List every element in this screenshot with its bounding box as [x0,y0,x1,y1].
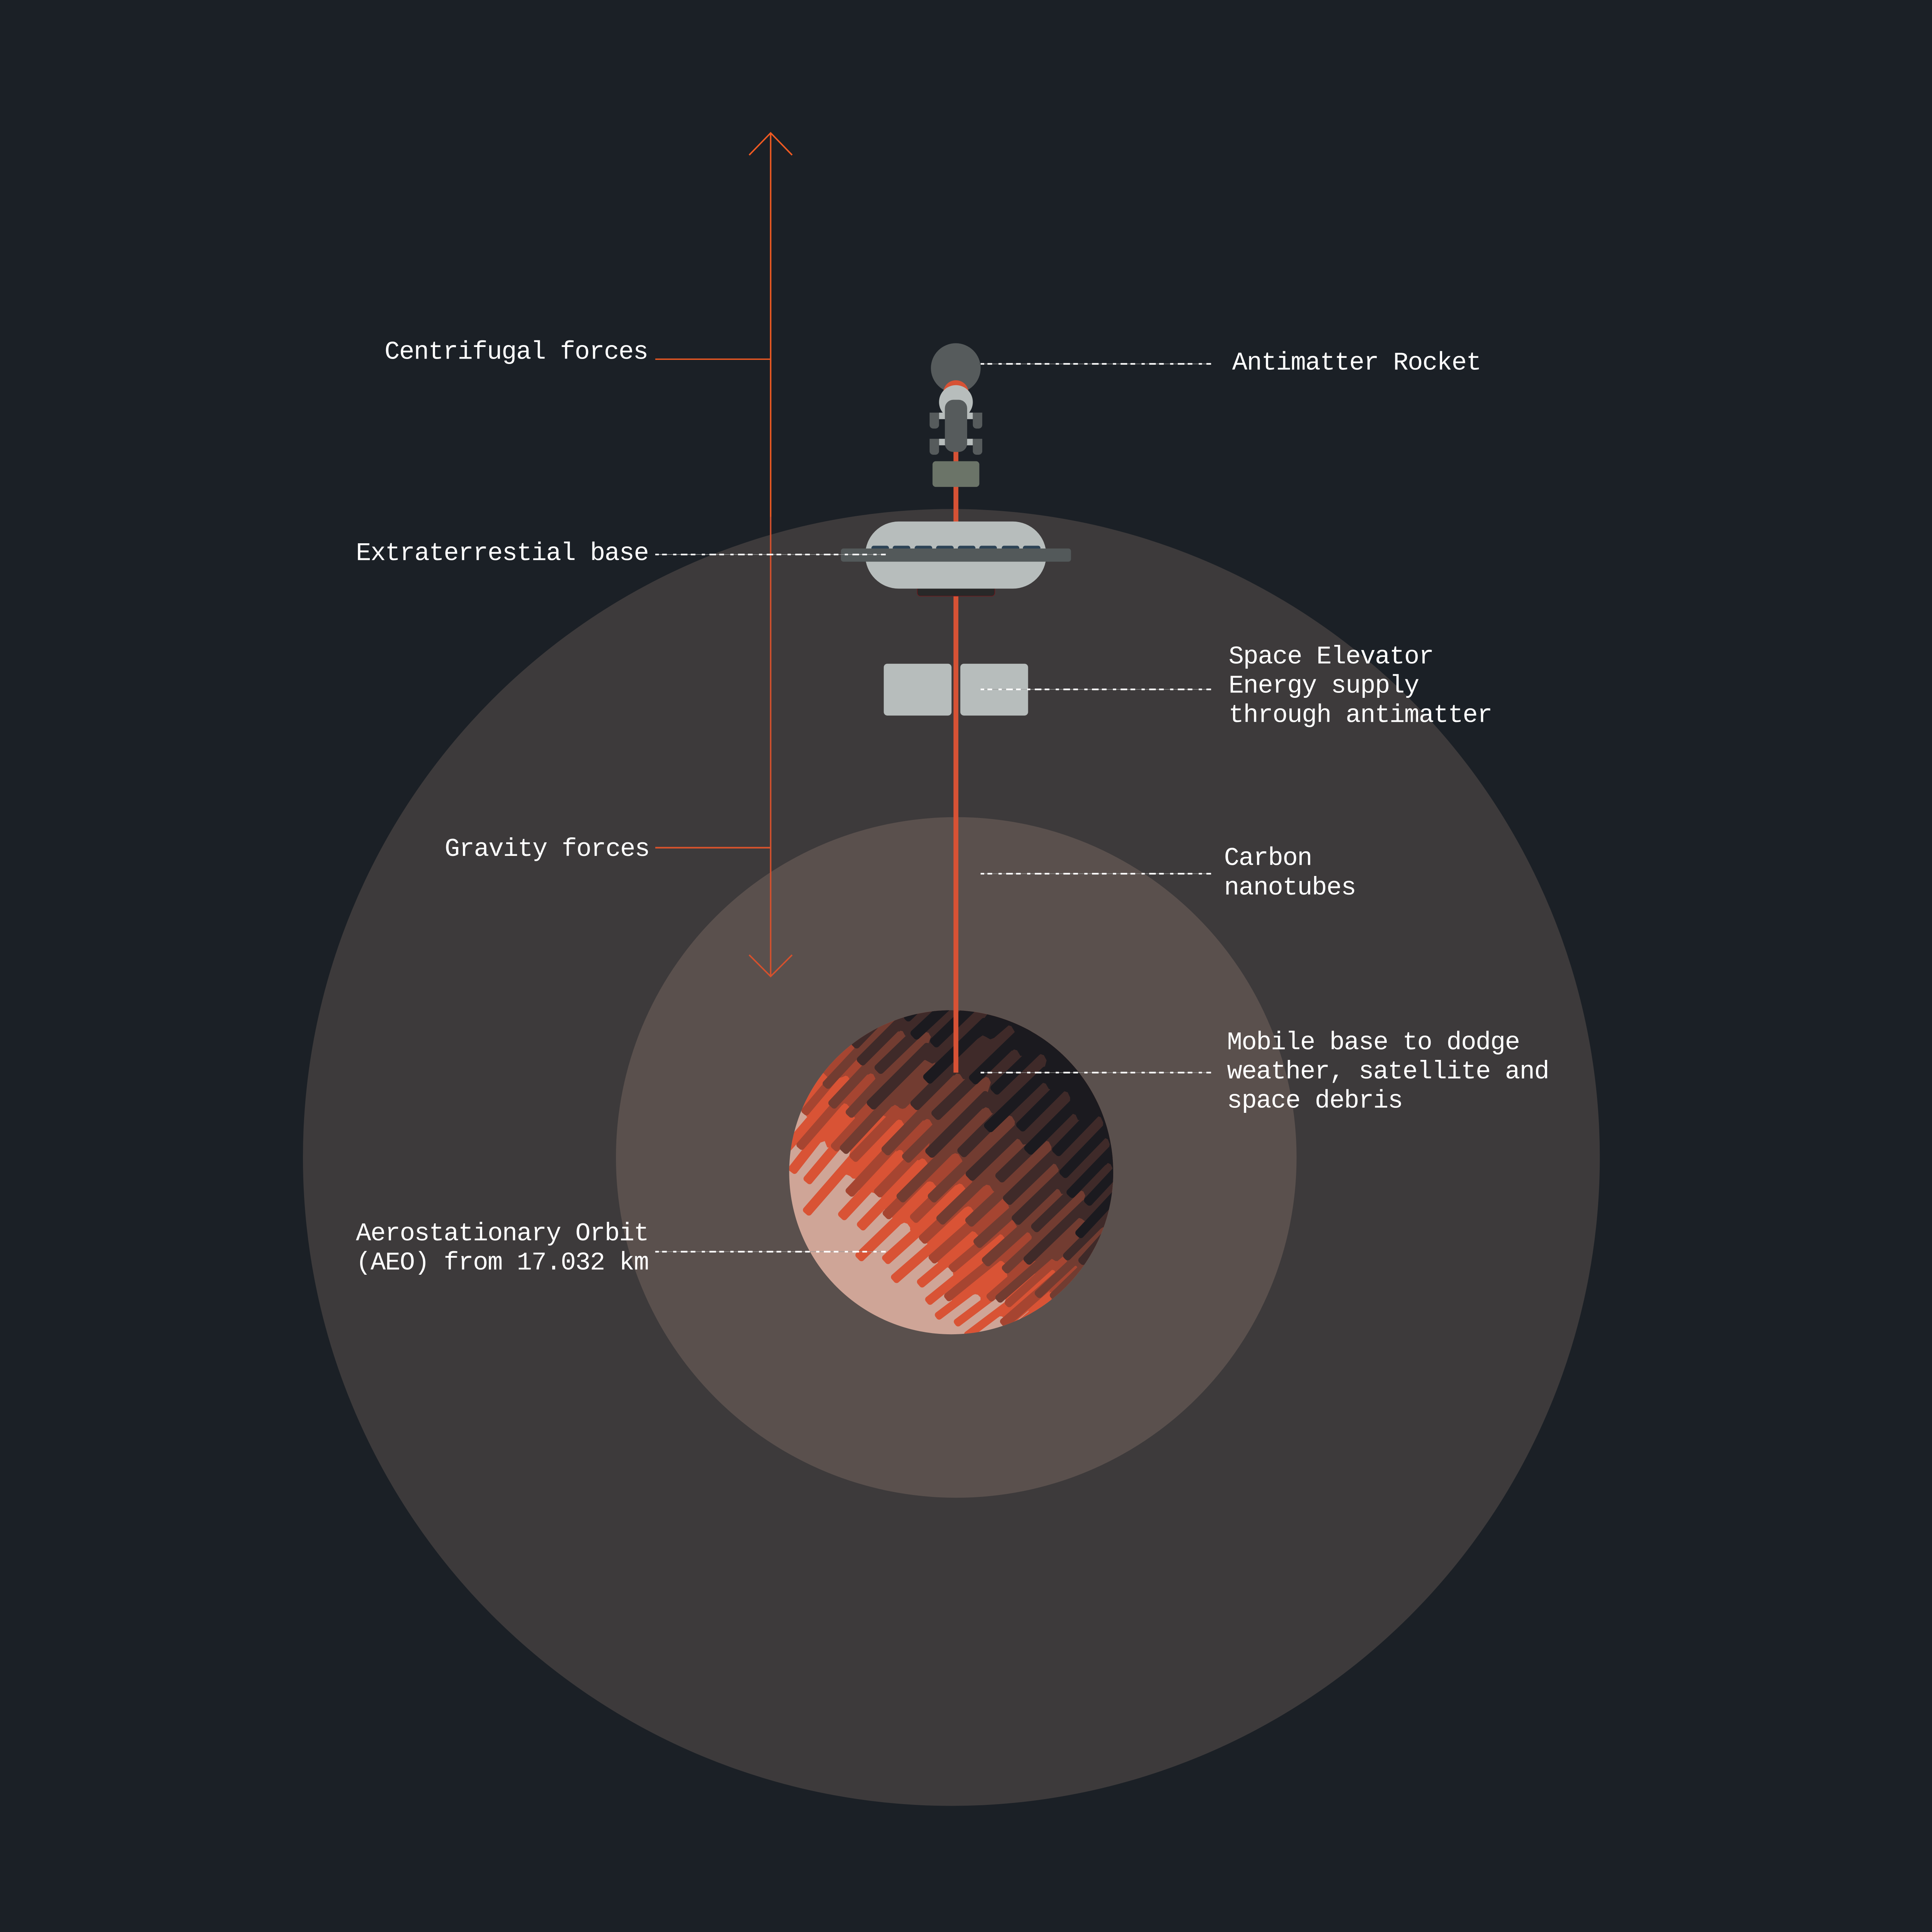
base strip [841,548,1071,562]
label: Space Elevator energy supply: Space Elevator [1229,642,1434,671]
label: Mobile base [1227,1028,1549,1116]
label: Aerostationary Orbit [356,1219,648,1277]
base windows [871,546,1041,552]
inner atmosphere circle [616,817,1296,1498]
planet layer: brown stripes [821,997,1144,1304]
rocket orange ring [943,380,969,406]
space elevator cable: carbon nanotubes [954,449,958,1073]
planet layer: light sliver [1017,1311,1029,1320]
label: Space Elevator energy supply: Energy supply [1229,672,1419,701]
leader: extraterrestrial base [655,554,886,555]
planet layer: red-brown stripes [795,997,1144,1329]
rocket body [945,400,967,452]
label: Space Elevator energy supply [1229,642,1492,730]
leader: aerostationary orbit [655,1251,886,1252]
rocket top sphere [931,343,981,393]
icon: energy panels [884,664,1028,716]
label: Extraterrestial base: Extraterrestial base [356,539,648,568]
planet layer: dark brown stripes [850,981,1144,1266]
rocket side pods [930,413,982,455]
rocket light collar [939,385,973,419]
icon: extraterrestrial base [841,522,1071,596]
label: Aerostationary Orbit: Aerostationary Orbit [356,1219,648,1248]
planet layer: orange stripes [789,1010,1113,1334]
label: Centrifugal forces: Centrifugal forces [384,338,648,367]
label: Aerostationary Orbit: (AEO) from 17.032 km [356,1248,648,1277]
base capsule [865,522,1046,588]
label: Carbon nanotubes: nanotubes [1224,873,1356,902]
base under tray [917,587,995,596]
planet layer: near-black stripes [903,957,1149,1240]
outer orbit circle [303,509,1600,1806]
label: Antimatter Rocket: Antimatter Rocket [1232,348,1481,377]
label: Mobile base: weather, satellite and [1227,1057,1549,1086]
label: Mobile base: space debris [1227,1087,1403,1116]
leader: centrifugal forces [655,359,770,360]
planet Mars with diagonal stripes [789,1010,1114,1335]
arrow: forces double-headed vertical arrow [749,133,792,976]
leader: mobile base [981,1072,1211,1073]
label: Mobile base: Mobile base to dodge [1227,1028,1520,1057]
label: Space Elevator energy supply: through antimatter [1229,701,1492,730]
label: Carbon nanotubes [1224,844,1356,902]
leader: gravity forces [655,847,770,849]
label: Carbon nanotubes: Carbon [1224,844,1312,872]
leader: carbon nanotubes [981,873,1211,874]
icon: antimatter rocket [930,343,982,487]
rocket cross bars [939,413,973,445]
label: Gravity forces: Gravity forces [445,835,650,864]
rocket cargo box [932,461,979,487]
leader: energy supply [981,689,1211,690]
